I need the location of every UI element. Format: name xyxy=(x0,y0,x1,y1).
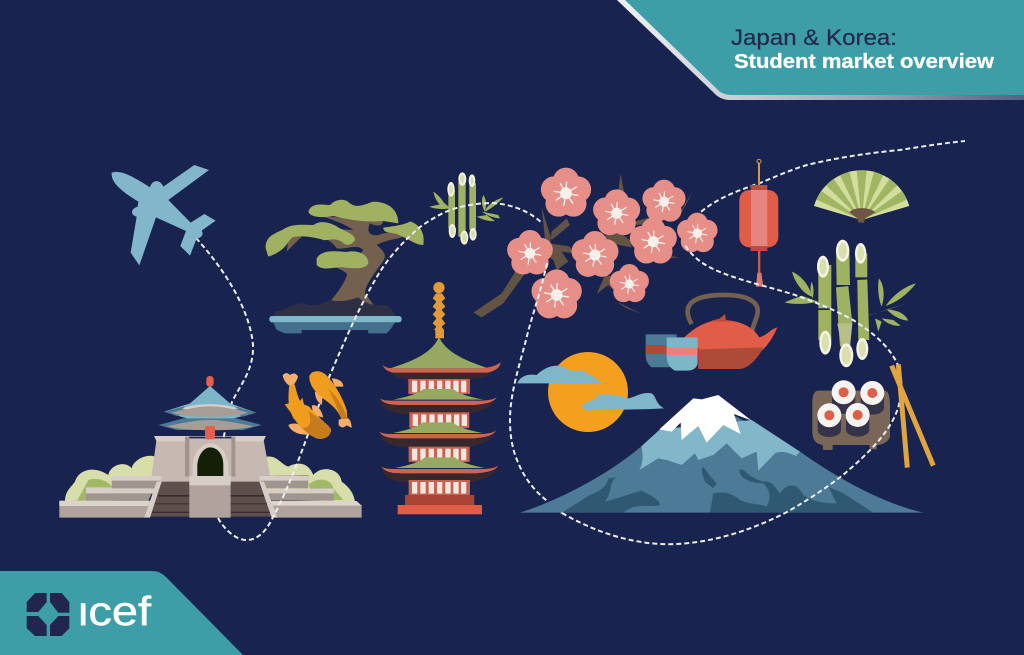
pagoda spire xyxy=(433,282,445,338)
icon: temple hall xyxy=(59,376,362,518)
pagoda tier 4 xyxy=(382,457,498,483)
icon: bonsai tree xyxy=(266,200,424,333)
dark cup xyxy=(646,334,677,367)
branches xyxy=(473,174,693,317)
icef logo mark xyxy=(27,593,69,636)
pagoda upper brim xyxy=(383,362,501,374)
dashed travel route: over temple, bonsai and small bamboo xyxy=(218,203,542,540)
pagoda tier 2 xyxy=(380,389,497,414)
icon: teapot and cups xyxy=(646,295,777,371)
pagoda wall 1 xyxy=(408,379,470,394)
icon: pagoda xyxy=(379,282,501,514)
icon: folding fan xyxy=(814,170,909,224)
dashed travel route: background sections xyxy=(196,141,965,518)
icef wordmark: icef xyxy=(78,588,152,634)
pagoda wall 4 xyxy=(409,480,470,496)
dashed travel route: over lower blossom xyxy=(526,263,547,340)
fish upper xyxy=(309,371,352,428)
icon: small bamboo xyxy=(429,172,503,245)
light cup xyxy=(667,337,698,371)
pagoda tier 3 xyxy=(379,422,496,448)
icon: sun xyxy=(548,352,628,432)
pagoda roof top xyxy=(390,337,488,368)
header banner xyxy=(617,0,1024,100)
icon: large bamboo xyxy=(784,240,916,367)
pagoda wall 3 xyxy=(409,447,470,462)
icon: airplane xyxy=(112,165,216,265)
fish lower xyxy=(283,373,331,439)
icon: mount fuji xyxy=(520,395,923,513)
pagoda base xyxy=(405,495,474,506)
teapot handle xyxy=(688,295,758,332)
icon: cherry blossom branch xyxy=(473,168,718,318)
icon: koi fish xyxy=(283,371,352,439)
dashed travel route: over mountain, sushi tray and large bamboo xyxy=(562,245,901,544)
icon: paper lantern xyxy=(739,159,778,287)
icon: chopsticks xyxy=(892,364,933,468)
icon: sushi tray xyxy=(812,380,890,450)
blossoms xyxy=(507,168,718,318)
icon: clouds xyxy=(517,366,664,411)
banner title line 2: Student market overview xyxy=(734,51,994,73)
footer logo panel xyxy=(0,571,243,655)
banner title line 1: Japan & Korea: xyxy=(731,25,897,50)
teapot body xyxy=(683,320,777,368)
pagoda wall 2 xyxy=(409,412,469,428)
